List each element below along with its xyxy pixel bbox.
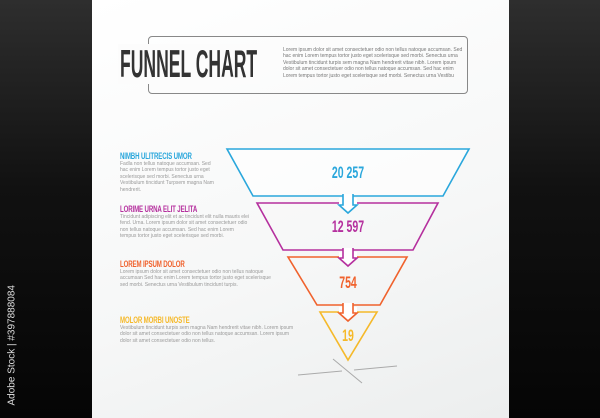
page <box>92 0 509 418</box>
step 4 text: Vestibulum tincidunt turpis sem magna Nam hendrerit vitae nibh. Lorem ipsum dolor sit amet consectetuer odio non tellus natoque accumsan. Lorem ipsum dolor sit amet consectetuer odio non tellus. <box>120 325 293 344</box>
base lines <box>298 359 397 383</box>
funnel level 1: 20 257 <box>332 162 364 182</box>
step 3 text: LOREM IPSUM DOLOR <box>120 259 185 269</box>
step 4 text: MOLOR MORBI UNOSTE <box>120 315 190 325</box>
step 2 text: LORIME URNA ELIT JELITA <box>120 204 197 214</box>
funnel level 2 <box>257 203 438 250</box>
arrow 3 <box>339 303 357 321</box>
step 3 text <box>120 259 271 288</box>
step 4 text <box>120 315 293 344</box>
arrow 1 <box>339 194 357 213</box>
step 1 text: NIMBH ULITRECIS UMOR <box>120 151 192 161</box>
step 1 text: Fadla non tellus natoque accumsan. Sed hac enim Lorem tempus tortor justo eget scelerisque sed morbi. Senectus urna Vestibulum tincidunt Turpsem magna Nam hendrerit. <box>120 161 214 193</box>
funnel level 1 <box>227 149 469 196</box>
arrow 2 <box>339 248 357 266</box>
funnel level 3: 754 <box>339 272 357 292</box>
step 2 text: Tincidunt adipiscing elit et ac tincidunt elit nulla mauris elei fend. Urna. Lorem ipsum dolor sit amet consectetuer odio non tellus natoque accumsan. Sed hac enim Lorem tempus tortor justo eget scelerisque sed morbi. <box>120 214 249 239</box>
funnel level 4: 19 <box>342 325 354 345</box>
header box <box>148 36 468 94</box>
funnel level 2: 12 597 <box>332 216 364 236</box>
side label: Adobe Stock | #397888084 <box>6 285 18 406</box>
step 3 text: Lorem ipsum dolor sit amet consectetuer odio non tellus natoque accumsan Sed hac enim Lorem tempus tortor justo eget scelerisque sed morbi. Senectus urna Vestibulum tincidunt turpis. <box>120 269 271 288</box>
funnel level 3 <box>288 257 407 305</box>
title: FUNNEL CHART <box>120 43 257 86</box>
funnel level 4 <box>320 312 377 360</box>
header text: Lorem ipsum dolor sit amet consectetuer odio non tellus natoque accumsan. Sed hac enim Lorem tempus tortor justo eget scelerisque sed morbi. Senectus urna Vestibulum tincidunt turpis sem magna Nam hendrerit vitae nibh. Lorem ipsum dolor sit amet consectetuer odio non tellus natoque accumsan. Sed hac enim Lorem tempus tortor justo eget scelerisque sed morbi. Senectus urna Vestibu <box>283 47 462 79</box>
